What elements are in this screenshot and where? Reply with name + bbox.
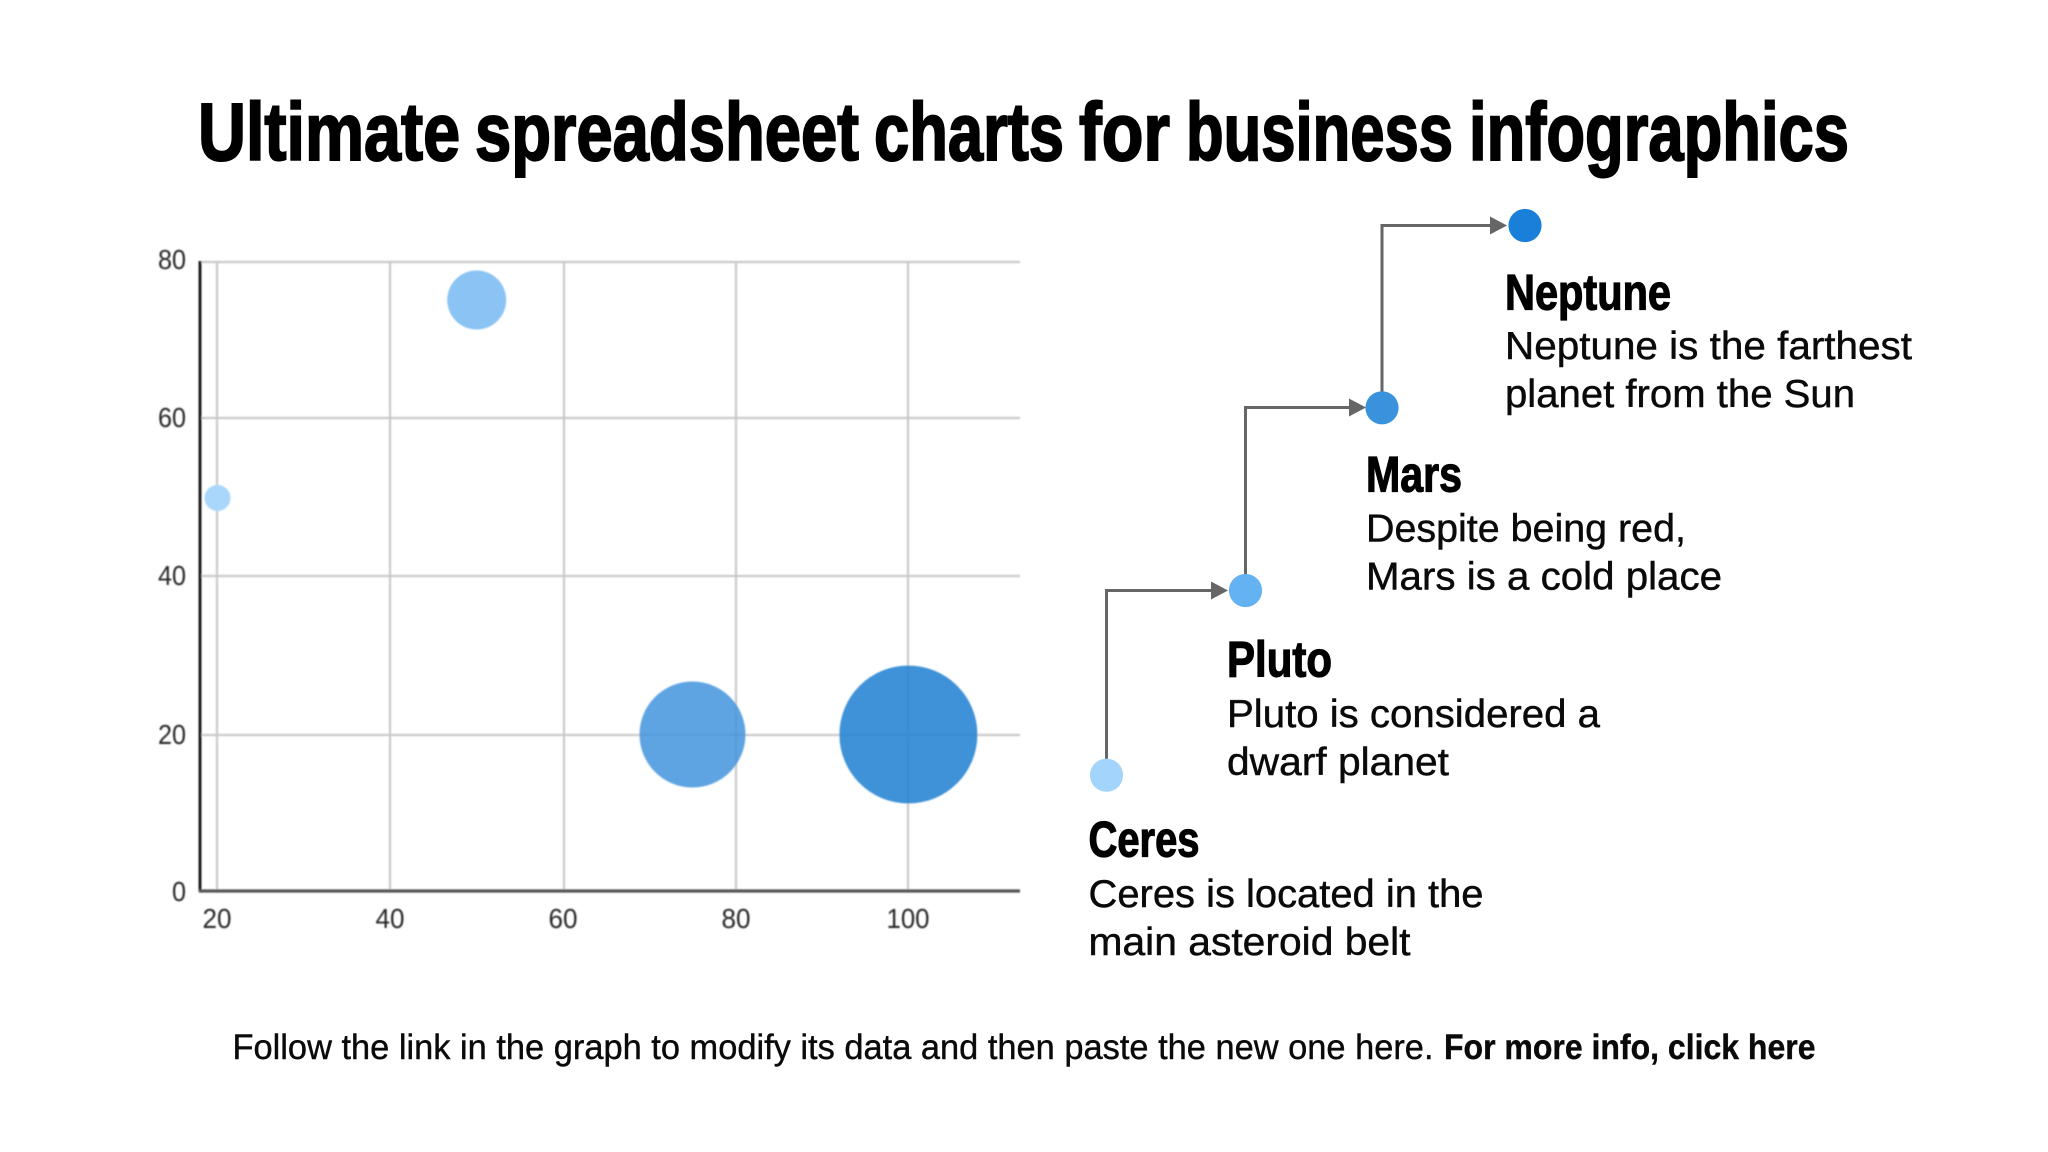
description: Mars: Despite being red, xyxy=(1366,508,1686,550)
description: Ceres: Ceres is located in the xyxy=(1088,873,1484,916)
y axis labels xyxy=(158,244,186,907)
footer note: Follow the link in the graph to modify its data and then paste the new one here. xyxy=(232,1028,1434,1067)
description: Pluto xyxy=(1227,693,1600,784)
y axis labels: 0 xyxy=(172,876,186,907)
dot: Mars xyxy=(1365,391,1399,424)
connector: Pluto to Mars xyxy=(1246,398,1366,575)
text block: Ceres xyxy=(1088,812,1484,964)
title: Ultimate xyxy=(198,87,460,178)
x axis labels xyxy=(202,903,930,934)
description: Ceres: main asteroid belt xyxy=(1088,921,1411,964)
x axis labels: 100 xyxy=(886,903,930,934)
x axis labels: 20 xyxy=(202,903,232,934)
bubble: Neptune xyxy=(839,666,977,804)
x axis xyxy=(199,889,1020,893)
text block: Neptune xyxy=(1505,264,1912,416)
text block: Pluto xyxy=(1227,632,1600,784)
description: Ceres xyxy=(1088,873,1484,964)
dot: Pluto xyxy=(1229,574,1262,607)
title xyxy=(198,87,1849,178)
description: Pluto: dwarf planet xyxy=(1227,741,1449,784)
title: spreadsheet xyxy=(475,87,859,178)
heading: Pluto: Pluto xyxy=(1227,632,1332,688)
heading: Mars: Mars xyxy=(1366,446,1462,502)
title: charts xyxy=(874,87,1064,178)
connector: Mars to Neptune xyxy=(1382,216,1507,392)
x axis labels: 60 xyxy=(548,903,578,934)
grid lines xyxy=(200,262,1020,891)
bubble chart xyxy=(158,244,1020,934)
description: Mars: Mars is a cold place xyxy=(1366,556,1722,598)
y axis labels: 40 xyxy=(158,560,186,591)
heading: Ceres: Ceres xyxy=(1088,812,1200,868)
description: Neptune xyxy=(1505,325,1912,416)
bubble: Ceres xyxy=(204,485,230,511)
bubble: Mars xyxy=(640,682,746,788)
title: for xyxy=(1079,87,1170,178)
y axis labels: 20 xyxy=(158,719,186,750)
y axis labels: 60 xyxy=(158,402,186,433)
description: Neptune: planet from the Sun xyxy=(1505,373,1855,416)
connector: Ceres to Pluto xyxy=(1106,582,1228,760)
title: infographics xyxy=(1469,87,1849,178)
dot: Neptune xyxy=(1508,209,1542,242)
description: Neptune: Neptune is the farthest xyxy=(1505,325,1912,368)
description: Mars xyxy=(1366,508,1722,598)
x axis labels: 40 xyxy=(376,903,404,934)
y axis xyxy=(199,261,201,892)
title: business xyxy=(1186,87,1453,178)
description: Pluto: Pluto is considered a xyxy=(1227,693,1600,736)
dot: Ceres xyxy=(1090,759,1123,792)
footer note: For more info, click here xyxy=(1444,1028,1816,1067)
bubble: Pluto xyxy=(447,270,506,330)
heading: Neptune: Neptune xyxy=(1505,264,1671,320)
y axis labels: 80 xyxy=(158,244,186,275)
text block: Mars xyxy=(1366,446,1722,598)
x axis labels: 80 xyxy=(722,903,750,934)
